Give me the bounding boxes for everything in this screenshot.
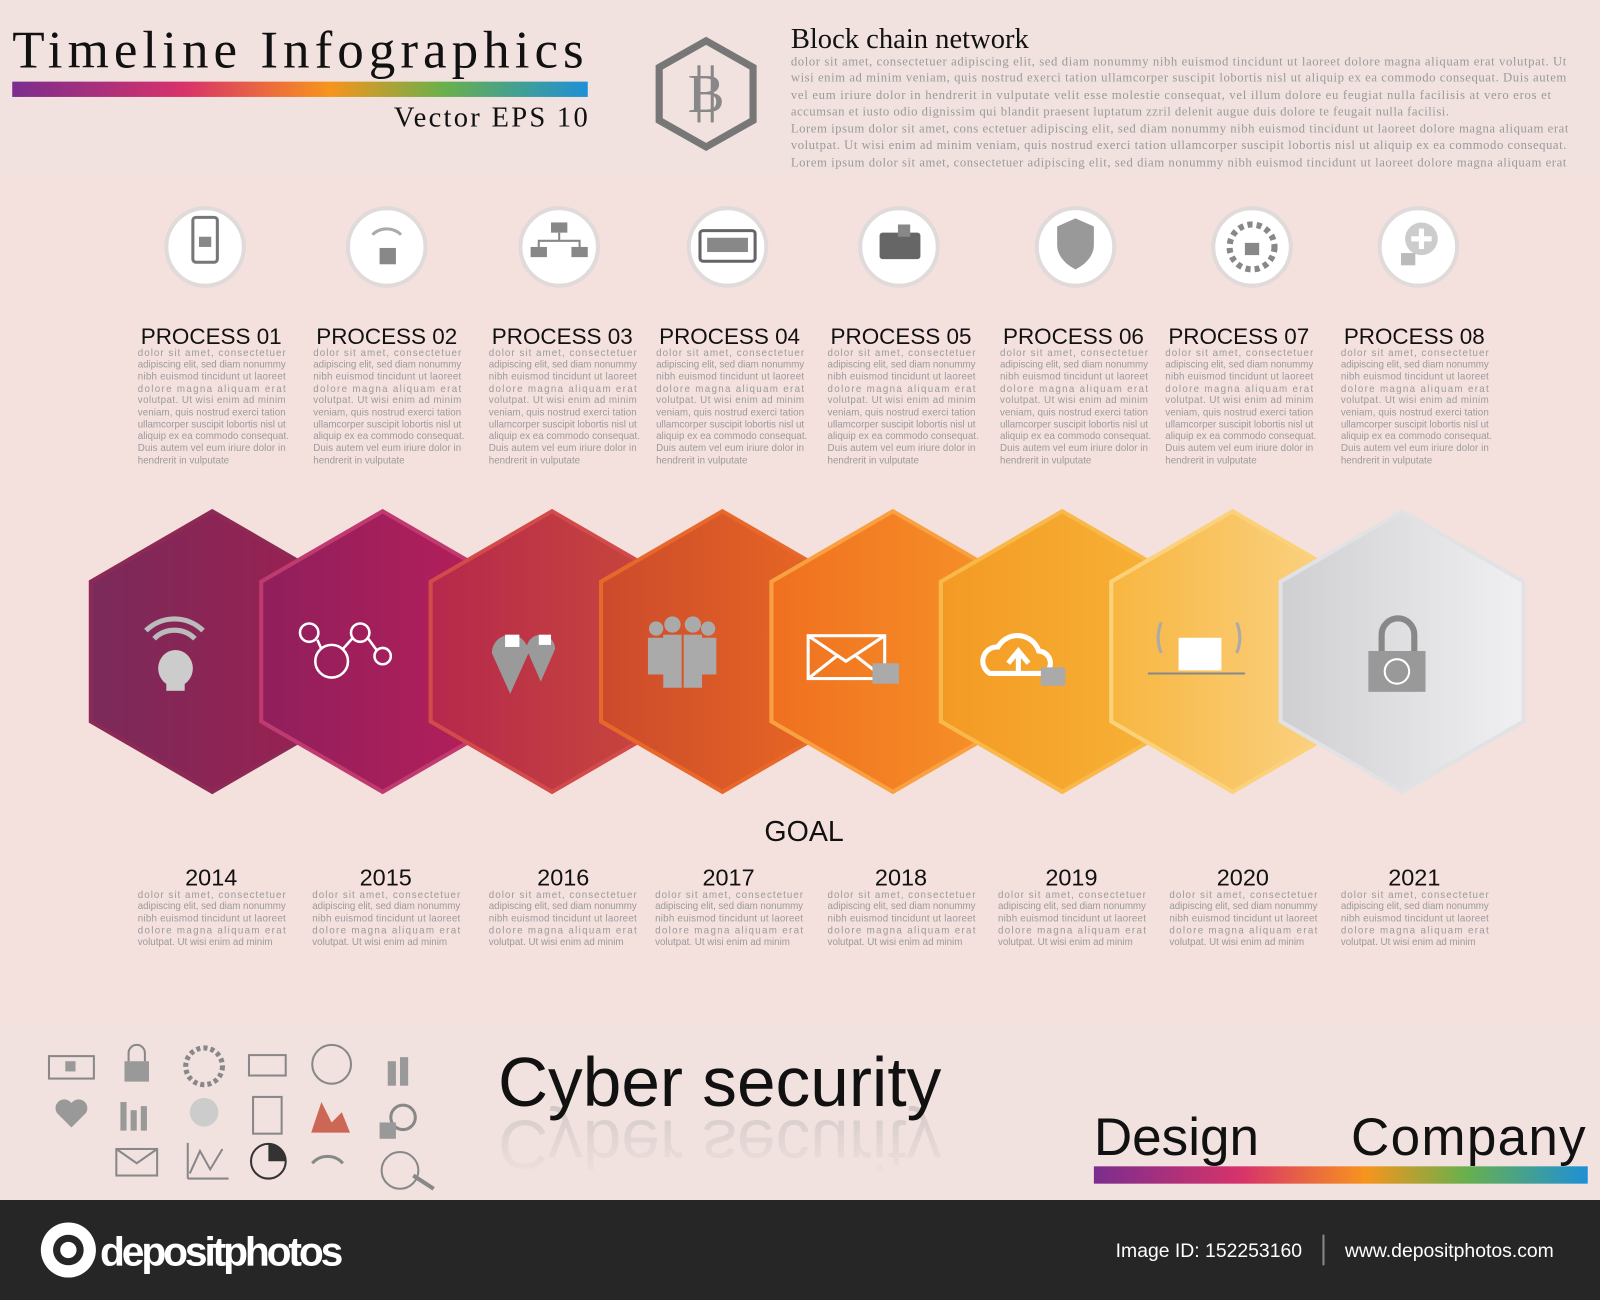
process titles: PROCESS 05 — [831, 324, 971, 349]
design company — [1094, 1108, 1588, 1184]
year text blocks: dolor sit amet, consectetuer — [1169, 890, 1318, 901]
process text blocks: dolore magna aliquam erat — [656, 384, 804, 395]
process text blocks: hendrerit in vulputate — [1165, 455, 1257, 466]
process text blocks: hendrerit in vulputate — [138, 455, 229, 466]
process text blocks: nibh euismod tincidunt ut laoreet — [1341, 372, 1489, 383]
process text blocks: aliquip ex ea commodo consequat. — [1341, 431, 1492, 442]
year text blocks: dolore magna aliquam erat — [138, 926, 286, 937]
year text blocks: nibh euismod tincidunt ut laoreet — [1169, 913, 1318, 924]
process text blocks: Duis autem vel eum iriure dolor in — [1000, 443, 1148, 454]
process text blocks: hendrerit in vulputate — [313, 455, 405, 466]
year text blocks: volutpat. Ut wisi enim ad minim — [828, 937, 962, 948]
process titles: PROCESS 02 — [316, 324, 457, 349]
process text blocks: aliquip ex ea commodo consequat. — [656, 431, 807, 442]
process text blocks: veniam, quis nostrud exerci tation — [1000, 407, 1148, 418]
process text blocks: hendrerit in vulputate — [656, 455, 747, 466]
process text blocks: nibh euismod tincidunt ut laoreet — [828, 372, 976, 383]
title — [12, 21, 588, 134]
process text blocks: nibh euismod tincidunt ut laoreet — [313, 372, 462, 383]
cyber security heading: Cyber security — [498, 1043, 942, 1121]
header text block: Lorem ipsum dolor sit amet, cons ectetuer adipiscing elit, sed diam nonummy nibh euismod tincidunt ut laoreet dolore magna aliquam erat — [791, 122, 1569, 136]
hexagon icons — [146, 616, 1426, 694]
year text blocks: nibh euismod tincidunt ut laoreet — [138, 913, 286, 924]
process text blocks: adipiscing elit, sed diam nonummy — [1165, 359, 1313, 370]
years — [185, 865, 1440, 891]
footer — [0, 1200, 1600, 1300]
process text blocks: volutpat. Ut wisi enim ad minim — [489, 395, 637, 406]
years: 2021 — [1388, 865, 1440, 891]
title: Vector EPS 10 — [394, 103, 588, 134]
year text blocks: adipiscing elit, sed diam nonummy — [828, 901, 976, 912]
footer: Image ID: 152253160 — [1116, 1240, 1302, 1262]
year text blocks: dolore magna aliquam erat — [828, 926, 976, 937]
process text blocks: hendrerit in vulputate — [489, 455, 580, 466]
process text blocks: nibh euismod tincidunt ut laoreet — [489, 372, 637, 383]
year text blocks: dolor sit amet, consectetuer — [828, 890, 976, 901]
header text block — [791, 24, 1569, 169]
year text blocks: dolor sit amet, consectetuer — [1341, 890, 1490, 901]
process text blocks: dolore magna aliquam erat — [313, 384, 462, 395]
process text blocks: aliquip ex ea commodo consequat. — [1000, 431, 1151, 442]
years: 2019 — [1045, 865, 1098, 891]
process text blocks: dolore magna aliquam erat — [828, 384, 976, 395]
process text blocks: veniam, quis nostrud exerci tation — [489, 407, 637, 418]
year text blocks: nibh euismod tincidunt ut laoreet — [312, 913, 460, 924]
year text blocks: adipiscing elit, sed diam nonummy — [138, 901, 286, 912]
year text blocks: volutpat. Ut wisi enim ad minim — [1169, 937, 1304, 948]
header text block: Lorem ipsum dolor sit amet, consectetuer adipiscing elit, sed diam nonummy nibh euismod tincidunt ut laoreet dolore magna aliquam erat — [791, 155, 1567, 169]
process text blocks: aliquip ex ea commodo consequat. — [828, 431, 979, 442]
process titles: PROCESS 07 — [1168, 324, 1309, 349]
process text blocks — [138, 348, 1492, 466]
process text blocks: dolore magna aliquam erat — [138, 384, 286, 395]
process text blocks: dolor sit amet, consectetuer — [1000, 348, 1149, 359]
process text blocks: aliquip ex ea commodo consequat. — [138, 431, 289, 442]
process text blocks: dolore magna aliquam erat — [1341, 384, 1489, 395]
goal label: GOAL — [764, 816, 844, 848]
process titles: PROCESS 04 — [659, 324, 800, 349]
process text blocks: dolor sit amet, consectetuer — [313, 348, 462, 359]
icon: bitcoin hexagon: B — [688, 63, 724, 124]
process text blocks: aliquip ex ea commodo consequat. — [313, 431, 464, 442]
process icons row — [166, 208, 1457, 286]
process text blocks: adipiscing elit, sed diam nonummy — [138, 359, 286, 370]
year text blocks: volutpat. Ut wisi enim ad minim — [655, 937, 790, 948]
header text block: volutpat. Ut wisi enim ad minim veniam, quis nostrud exerci tation ullamcorper suscipit lobortis nisl ut aliquip ex ea commodo consequat. — [791, 138, 1566, 152]
process text blocks: volutpat. Ut wisi enim ad minim — [828, 395, 976, 406]
process titles: PROCESS 08 — [1344, 324, 1485, 349]
years: 2016 — [537, 865, 589, 891]
process text blocks: dolore magna aliquam erat — [489, 384, 637, 395]
header band — [0, 0, 1600, 173]
year text blocks: dolore magna aliquam erat — [1169, 926, 1318, 937]
process text blocks: Duis autem vel eum iriure dolor in — [138, 443, 286, 454]
process text blocks: veniam, quis nostrud exerci tation — [138, 407, 286, 418]
process text blocks: dolore magna aliquam erat — [1165, 384, 1314, 395]
process text blocks: nibh euismod tincidunt ut laoreet — [1165, 372, 1314, 383]
year text blocks: dolor sit amet, consectetuer — [312, 890, 461, 901]
process text blocks: ullamcorper suscipit lobortis nisl ut — [656, 420, 804, 431]
process titles: PROCESS 01 — [141, 324, 282, 349]
process text blocks: dolor sit amet, consectetuer — [489, 348, 637, 359]
footer: www.depositphotos.com — [1344, 1240, 1554, 1262]
header text block: accumsan et iusto odio dignissim qui blandit praesent luptatum zzril delenit augue duis dolore te feugait nulla facilisi. — [791, 104, 1449, 118]
year text blocks: adipiscing elit, sed diam nonummy — [312, 901, 460, 912]
process text blocks: Duis autem vel eum iriure dolor in — [828, 443, 976, 454]
header text block: dolor sit amet, consectetuer adipiscing elit, sed diam nonummy nibh euismod tincidunt ut laoreet dolore magna aliquam erat volutpat. Ut — [791, 54, 1567, 68]
process text blocks: Duis autem vel eum iriure dolor in — [1165, 443, 1313, 454]
process text blocks: Duis autem vel eum iriure dolor in — [313, 443, 461, 454]
icon glyphs — [193, 217, 1438, 269]
years: 2018 — [875, 865, 927, 891]
process text blocks: veniam, quis nostrud exerci tation — [656, 407, 804, 418]
year text blocks: nibh euismod tincidunt ut laoreet — [655, 913, 803, 924]
year text blocks: volutpat. Ut wisi enim ad minim — [1341, 937, 1476, 948]
year text blocks: dolore magna aliquam erat — [1341, 926, 1489, 937]
year text blocks: dolore magna aliquam erat — [655, 926, 803, 937]
process text blocks: dolore magna aliquam erat — [1000, 384, 1148, 395]
process text blocks: adipiscing elit, sed diam nonummy — [656, 359, 804, 370]
process text blocks: dolor sit amet, consectetuer — [828, 348, 976, 359]
year text blocks: volutpat. Ut wisi enim ad minim — [138, 937, 273, 948]
process text blocks: aliquip ex ea commodo consequat. — [489, 431, 640, 442]
process text blocks: dolor sit amet, consectetuer — [1165, 348, 1314, 359]
process text blocks: ullamcorper suscipit lobortis nisl ut — [138, 420, 286, 431]
year text blocks: volutpat. Ut wisi enim ad minim — [489, 937, 624, 948]
process text blocks: adipiscing elit, sed diam nonummy — [313, 359, 461, 370]
years: 2014 — [185, 865, 237, 891]
process text blocks: volutpat. Ut wisi enim ad minim — [313, 395, 461, 406]
cyber security heading — [490, 1043, 959, 1184]
years: 2015 — [360, 865, 412, 891]
year text blocks: volutpat. Ut wisi enim ad minim — [998, 937, 1133, 948]
header text block: vel eum iriure dolor in hendrerit in vulputate velit esse molestie consequat, vel illum dolore eu feugiat nulla facilisis at vero eros et — [791, 88, 1551, 102]
process text blocks: dolor sit amet, consectetuer — [1341, 348, 1490, 359]
hexagon timeline — [91, 511, 1523, 792]
process text blocks: nibh euismod tincidunt ut laoreet — [656, 372, 804, 383]
year text blocks: adipiscing elit, sed diam nonummy — [1341, 901, 1489, 912]
process text blocks: veniam, quis nostrud exerci tation — [1341, 407, 1489, 418]
title: Timeline Infographics — [12, 21, 584, 79]
year text blocks: nibh euismod tincidunt ut laoreet — [489, 913, 637, 924]
year text blocks — [138, 890, 1490, 948]
year text blocks: dolore magna aliquam erat — [998, 926, 1146, 937]
process text blocks: Duis autem vel eum iriure dolor in — [489, 443, 637, 454]
design company: Company — [1351, 1108, 1586, 1167]
header text block: Block chain network — [791, 24, 1029, 55]
process text blocks: ullamcorper suscipit lobortis nisl ut — [1000, 420, 1148, 431]
icon: bitcoin hexagon — [659, 41, 753, 147]
process text blocks: Duis autem vel eum iriure dolor in — [656, 443, 804, 454]
year text blocks: dolore magna aliquam erat — [489, 926, 637, 937]
year text blocks: adipiscing elit, sed diam nonummy — [655, 901, 803, 912]
years: 2020 — [1217, 865, 1269, 891]
year text blocks: nibh euismod tincidunt ut laoreet — [998, 913, 1146, 924]
process text blocks: ullamcorper suscipit lobortis nisl ut — [313, 420, 462, 431]
process text blocks: volutpat. Ut wisi enim ad minim — [1165, 395, 1313, 406]
footer: depositphotos — [100, 1228, 343, 1274]
process titles: PROCESS 06 — [1003, 324, 1144, 349]
process text blocks: volutpat. Ut wisi enim ad minim — [1341, 395, 1489, 406]
process text blocks: hendrerit in vulputate — [1341, 455, 1432, 466]
year text blocks: adipiscing elit, sed diam nonummy — [489, 901, 637, 912]
process text blocks: veniam, quis nostrud exerci tation — [828, 407, 976, 418]
process text blocks: veniam, quis nostrud exerci tation — [313, 407, 461, 418]
design company: Design — [1094, 1108, 1259, 1167]
process text blocks: dolor sit amet, consectetuer — [656, 348, 805, 359]
process text blocks: adipiscing elit, sed diam nonummy — [1341, 359, 1489, 370]
process text blocks: hendrerit in vulputate — [828, 455, 919, 466]
process titles — [141, 324, 1485, 349]
process text blocks: adipiscing elit, sed diam nonummy — [1000, 359, 1148, 370]
year text blocks: dolor sit amet, consectetuer — [655, 890, 804, 901]
process titles: PROCESS 03 — [492, 324, 633, 349]
process text blocks: volutpat. Ut wisi enim ad minim — [656, 395, 804, 406]
process text blocks: volutpat. Ut wisi enim ad minim — [1000, 395, 1148, 406]
process text blocks: nibh euismod tincidunt ut laoreet — [138, 372, 286, 383]
year text blocks: adipiscing elit, sed diam nonummy — [998, 901, 1146, 912]
process text blocks: Duis autem vel eum iriure dolor in — [1341, 443, 1489, 454]
year text blocks: dolor sit amet, consectetuer — [138, 890, 286, 901]
years: 2017 — [702, 865, 755, 891]
bottom band — [0, 1027, 1600, 1200]
year text blocks: dolor sit amet, consectetuer — [489, 890, 637, 901]
year text blocks: adipiscing elit, sed diam nonummy — [1169, 901, 1317, 912]
process text blocks: volutpat. Ut wisi enim ad minim — [138, 395, 286, 406]
year text blocks: dolor sit amet, consectetuer — [998, 890, 1147, 901]
process text blocks: ullamcorper suscipit lobortis nisl ut — [489, 420, 637, 431]
cyber security heading: Cyber security — [498, 1105, 942, 1183]
process text blocks: nibh euismod tincidunt ut laoreet — [1000, 372, 1148, 383]
process text blocks: dolor sit amet, consectetuer — [138, 348, 286, 359]
process text blocks: adipiscing elit, sed diam nonummy — [489, 359, 637, 370]
header text block: wisi enim ad minim veniam, quis nostrud exerci tation ullamcorper suscipit lobortis nisl ut aliquip ex ea commodo consequat. Duis autem — [791, 71, 1566, 85]
process text blocks: ullamcorper suscipit lobortis nisl ut — [1165, 420, 1314, 431]
process text blocks: adipiscing elit, sed diam nonummy — [828, 359, 976, 370]
icon grid — [49, 1045, 434, 1189]
year text blocks: nibh euismod tincidunt ut laoreet — [1341, 913, 1489, 924]
process text blocks: aliquip ex ea commodo consequat. — [1165, 431, 1316, 442]
year text blocks: nibh euismod tincidunt ut laoreet — [828, 913, 976, 924]
process text blocks: ullamcorper suscipit lobortis nisl ut — [1341, 420, 1489, 431]
process text blocks: ullamcorper suscipit lobortis nisl ut — [828, 420, 976, 431]
process text blocks: veniam, quis nostrud exerci tation — [1165, 407, 1313, 418]
year text blocks: volutpat. Ut wisi enim ad minim — [312, 937, 447, 948]
process text blocks: hendrerit in vulputate — [1000, 455, 1091, 466]
year text blocks: dolore magna aliquam erat — [312, 926, 460, 937]
